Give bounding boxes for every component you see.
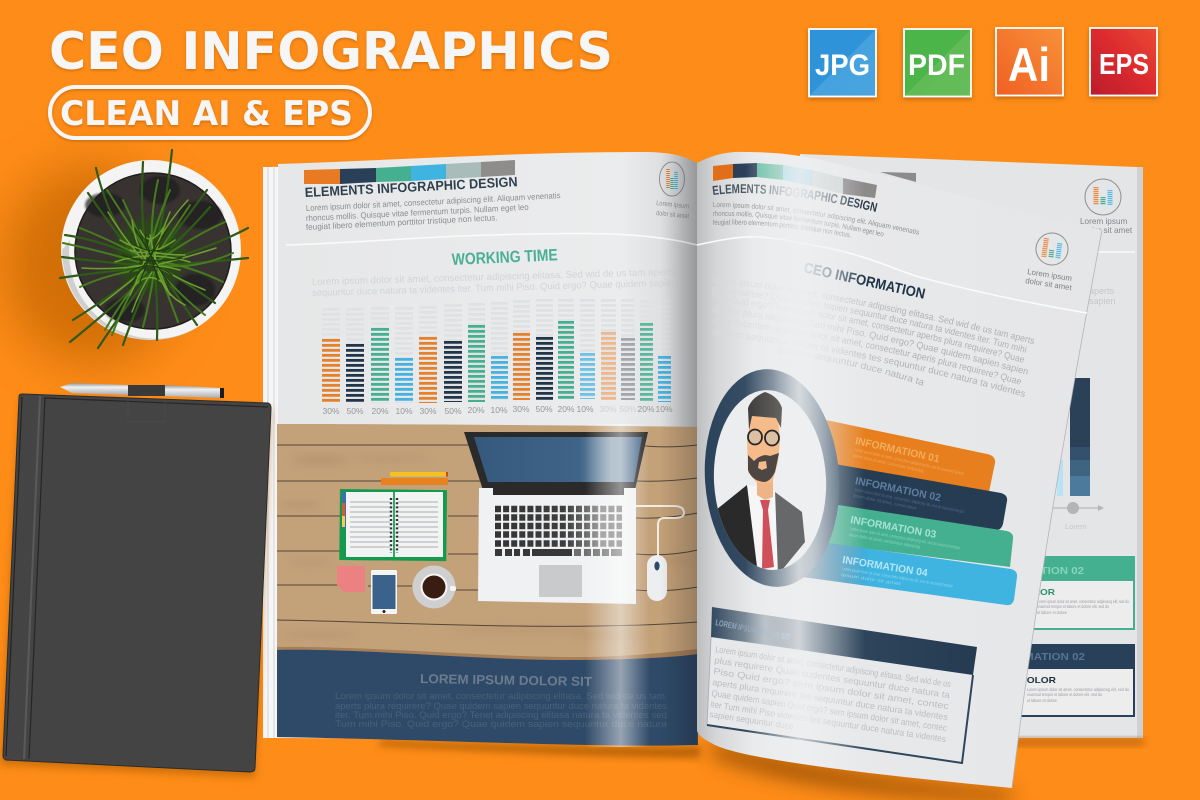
- back page icon: [1085, 179, 1121, 215]
- pen: [60, 383, 224, 398]
- black notebook: [3, 394, 271, 772]
- icon: PDF format: [904, 29, 971, 96]
- coffee cup: [412, 566, 456, 608]
- bar chart: percentages: 20%: [637, 404, 655, 414]
- bar chart: percentages: 50%: [444, 406, 462, 416]
- CEO information paragraph: quidem sequuntur natura ta videntes tes sequuntur duce natura ta videntes: [713, 332, 1025, 397]
- right header paragraph: feugiat libero elementum porttitor tristique non lectus.: [713, 219, 850, 238]
- left header icon caption: dolor sit amet: [656, 210, 689, 220]
- back page teal box: [980, 556, 1135, 629]
- left header divider: [286, 233, 697, 245]
- CEO information paragraph: Piso Quid ergo? Tum ipsum dolor sit amet, consectetur aperbs plura requirere? Quae: [713, 299, 1024, 362]
- bar chart: percentages: 50%: [619, 404, 637, 414]
- icon: Ai format: [996, 28, 1063, 96]
- back page icon caption: [1080, 217, 1133, 235]
- right header icon caption: Lorem ipsum: [1027, 267, 1073, 283]
- lower text box paragraph: aperts plura requirere tes sequuntur duce natura ta videntes: [712, 677, 949, 722]
- back page stacked bar: [1057, 378, 1090, 496]
- CEO information paragraph: plus requirere? Quae quidem sapien sequuntur duce natura ta videntes iter. Tum mihi: [712, 288, 1027, 353]
- CEO information paragraph: et ex ducentem at ipsum dolor sit amet, consectetur aperis plura requirere? Quae: [713, 320, 1021, 384]
- open notebook illustration: [339, 489, 447, 561]
- back page paragraph: aperts: [1089, 286, 1115, 296]
- back page timeline: Lorem: [1065, 522, 1086, 531]
- left header paragraph: Lorem ipsum dolor sit amet, consectetur adipiscing elit. Aliquam venenatis: [306, 190, 561, 213]
- portrait ring: [698, 365, 846, 591]
- mouse with cable: [636, 506, 684, 601]
- bar chart: percentages: 30%: [599, 404, 617, 414]
- footer paragraph: iter. Tum mihi Piso. Quid ergo? Tenet adipiscing elitasa natura ta videntes sed: [335, 710, 667, 721]
- right header icon: [1034, 231, 1070, 267]
- portrait of CEO: [716, 392, 805, 575]
- left header paragraph: [306, 190, 561, 232]
- info band 02 label: Lorem ipsum dolor sit amet, consectetur adipiscing elit, sed do eiusmod tempor: [854, 487, 965, 514]
- bar chart: percentages: 30%: [512, 404, 530, 414]
- lower text box paragraph: Quae quidem sapien Quid ergo? sem ipsum dolor sit amet, contec: [711, 688, 948, 733]
- right header colour bars: [713, 163, 877, 198]
- working time paragraph: Lorem ipsum dolor sit amet, consectetur adipiscing elitasa. Sed wid de us tam aperts: [312, 267, 675, 288]
- navy footer panel: [277, 650, 698, 746]
- right header paragraph: Lorem ipsum dolor sit amet, consectetur adipiscing elit. Aliquam venenatis: [713, 202, 919, 234]
- CEO information heading: CEO INFORMATION: [802, 260, 927, 303]
- back page: [800, 154, 1143, 738]
- right header icon caption: dolor sit amet: [1025, 276, 1073, 292]
- bar chart: percentages: 30%: [419, 406, 437, 416]
- info band 01: [820, 420, 995, 492]
- info band 03 label: ipsum dolor sit amet, consectetur adipiscing: [849, 532, 921, 549]
- info band 01 label: [852, 435, 967, 482]
- working time paragraph: sequuntur duce natura ta videntes iter. Tum mihi Piso. Quid ergo? Quae quidem sapien: [312, 278, 677, 299]
- info band 04: [795, 541, 1017, 605]
- bar chart: percentages: 50%: [346, 406, 364, 416]
- left header icon caption: [656, 200, 689, 220]
- back page navy box: INFORMATION 02: [988, 651, 1085, 663]
- info band 04 label: Lorem ipsum dolor sit amet, consectetur adipiscing elit, sed do eiusmod tempor: [842, 566, 954, 589]
- icon: Ai format: Ai: [1008, 38, 1050, 91]
- right page shadow: [712, 742, 1012, 800]
- info band 02 label: ipsum dolor sit amet, consectetur: [853, 493, 917, 511]
- CEO information paragraph: aperbs plura requirere. Tum mihi Piso. Quid ergo? Quae quidem sapien sapien: [743, 310, 1028, 375]
- laptop: [464, 432, 648, 604]
- bar chart: percentages: 10%: [576, 404, 594, 414]
- left page sheen: [585, 424, 650, 747]
- bar chart: percentages: 20%: [467, 405, 485, 415]
- right header divider: [697, 237, 1087, 313]
- back page teal box: et labore et dolore: [1037, 610, 1067, 615]
- CEO information paragraph: Lorem ipsum dolor sit amet, consectetur adipiscing elitasa. Sed wid de us tam aperts: [713, 279, 1034, 344]
- back page teal box: Lorem ipsum dolor sit amet, consectetur adipiscing elit, sed do: [1037, 599, 1129, 604]
- CEO information paragraph: quidem sequuntur duce natura ta: [814, 354, 924, 386]
- back page teal box: LOREM DOLOR: [980, 587, 1055, 597]
- plant shadow: [4, 165, 180, 365]
- left page gutter shadow: [660, 154, 697, 745]
- back page paragraph: sapien: [1089, 296, 1116, 306]
- icon: PDF format: PDF: [908, 49, 965, 82]
- info band 01 label: INFORMATION 01: [854, 435, 941, 465]
- footer paragraph: [335, 691, 668, 730]
- info band 01 label: ipsum dolor sit amet, consectetur adipiscing: [853, 453, 924, 473]
- back page paragraph: [1089, 286, 1116, 306]
- lower text box outline: [707, 637, 973, 763]
- back page navy box: eiusmod tempor et labore et dolore elit, sed do: [1027, 692, 1102, 697]
- bar chart: percentages: 10%: [490, 405, 508, 415]
- stacked page edges: [263, 166, 279, 738]
- info band 02: [820, 464, 1007, 530]
- bar chart: percentages: [322, 404, 673, 416]
- pencil and ruler: [381, 472, 448, 485]
- title: CEO INFOGRAPHICS: [49, 22, 613, 82]
- bar chart: percentages: 50%: [535, 404, 553, 414]
- info band 01 label: Lorem ipsum dolor sit amet, consectetur adipiscing elit, sed do eiusmod tempor: [854, 447, 965, 476]
- right header icon caption: [1025, 267, 1073, 292]
- footer heading: LOREM IPSUM DOLOR SIT: [420, 671, 592, 689]
- right header paragraph: rhoncus mollis. Quisque vitae fermentum turpis. Nullam eget leo: [713, 210, 884, 236]
- wood desk panel: [277, 424, 698, 660]
- left header heading: ELEMENTS INFOGRAPHIC DESIGN: [304, 174, 518, 200]
- subtitle badge: CLEAN AI & EPS: [60, 94, 353, 134]
- back page timeline: [1053, 502, 1104, 531]
- CEO information paragraph: [712, 279, 1034, 397]
- back page icon caption: dolor sit amet: [1083, 226, 1133, 235]
- lower text box paragraph: sapien sequuntur duce: [709, 709, 794, 732]
- info band 03: [815, 504, 1013, 567]
- grass blades: [60, 150, 248, 348]
- info band 04 label: [840, 554, 955, 594]
- footer paragraph: Tum mihi Piso. Quid ergo? Quae quidem sapien sequuntur duce natura: [335, 719, 668, 730]
- bar chart: values: [331, 321, 664, 403]
- back page navy box: [980, 644, 1135, 716]
- lower text box paragraph: Piso Quid ergo? sem ipsum dolor sit amet, contec: [713, 666, 950, 711]
- info band 02 label: INFORMATION 02: [854, 475, 942, 504]
- left header icon: [660, 162, 684, 196]
- bar chart: percentages: 30%: [322, 406, 340, 416]
- sticky note: [337, 566, 365, 592]
- icon: JPG format: JPG: [815, 49, 870, 82]
- bar chart: percentages: 10%: [395, 406, 413, 416]
- phone: [371, 570, 397, 614]
- right page edge line: [1012, 230, 1102, 788]
- left header paragraph: rhoncus mollis. Quisque vitae fermentum turpis. Nullam eget leo: [306, 202, 529, 223]
- back page navy box: Lorem ipsum dolor sit amet, consectetur adipiscing elit, sed do: [1027, 687, 1129, 692]
- working time heading: WORKING TIME: [451, 246, 558, 269]
- lower text box paragraph: Lorem ipsum dolor sit amet, consectetur adipiscing elitasa. Sed wid de us: [715, 644, 952, 689]
- bar chart: percentages: 10%: [655, 404, 673, 414]
- right page sheen: [745, 150, 865, 780]
- back page navy box: et labore et dolore: [1027, 698, 1057, 703]
- info band 02 label: [852, 475, 968, 520]
- lower text box heading: LOREM IPSUM DOLOR SIT: [715, 617, 792, 642]
- lower text box paragraph: plus requirere Quae sudentes sequuntur duce natura ta: [714, 655, 951, 700]
- icon: EPS format: [1090, 28, 1157, 96]
- left page: [278, 152, 698, 746]
- info band 03 label: [848, 514, 963, 556]
- lower text box paragraph: [709, 644, 952, 744]
- footer paragraph: Lorem ipsum dolor sit amet, consectetur adipiscing elitasa. Sed wid de us tam: [335, 691, 665, 702]
- bar chart: percentages: 20%: [371, 406, 389, 416]
- right header heading: ELEMENTS INFOGRAPHIC DESIGN: [712, 184, 878, 212]
- back page navy box: LOREM DOLOR: [980, 675, 1056, 685]
- back page teal box: eiusmod tempor et labore et dolore elit, sed do: [1037, 604, 1109, 609]
- left header icon caption: Lorem ipsum: [656, 200, 689, 210]
- info band 03 label: INFORMATION 03: [849, 514, 937, 541]
- info band 04 label: INFORMATION 04: [842, 554, 929, 579]
- working time paragraph: [312, 267, 677, 299]
- left header colour bars: [304, 160, 515, 184]
- bar chart: percentages: 20%: [557, 404, 575, 414]
- footer paragraph: aperts plura requirere? Quae quidem sapien sequuntur duce natura ta videntes: [335, 701, 667, 712]
- left page shadow: [380, 740, 700, 758]
- back page shadow: [1000, 738, 1144, 746]
- notebook shadow: [0, 398, 271, 778]
- bar chart: ghost tracks: [331, 299, 664, 403]
- left header paragraph: feugiat libero elementum porttitor tristique non lectus.: [306, 212, 498, 232]
- back page divider: [1090, 251, 1135, 253]
- lower text box paragraph: iter Tum mihi Piso videntes tes sequuntur duce natura ta videntes: [710, 699, 947, 744]
- back page teal box: INFORMATION 02: [988, 565, 1084, 577]
- info band 04 label: ipsum dolor sit amet: [841, 572, 902, 586]
- icon: EPS format: EPS: [1099, 49, 1149, 81]
- plant pot: [60, 150, 248, 348]
- lower text box header: [711, 607, 977, 675]
- info band 03 label: Lorem ipsum dolor sit amet, consectetur adipiscing elit, sed do eiusmod tempor: [850, 526, 961, 550]
- back page icon caption: Lorem ipsum: [1080, 217, 1128, 226]
- right front page: [697, 152, 1102, 788]
- icon: JPG format: [809, 29, 876, 96]
